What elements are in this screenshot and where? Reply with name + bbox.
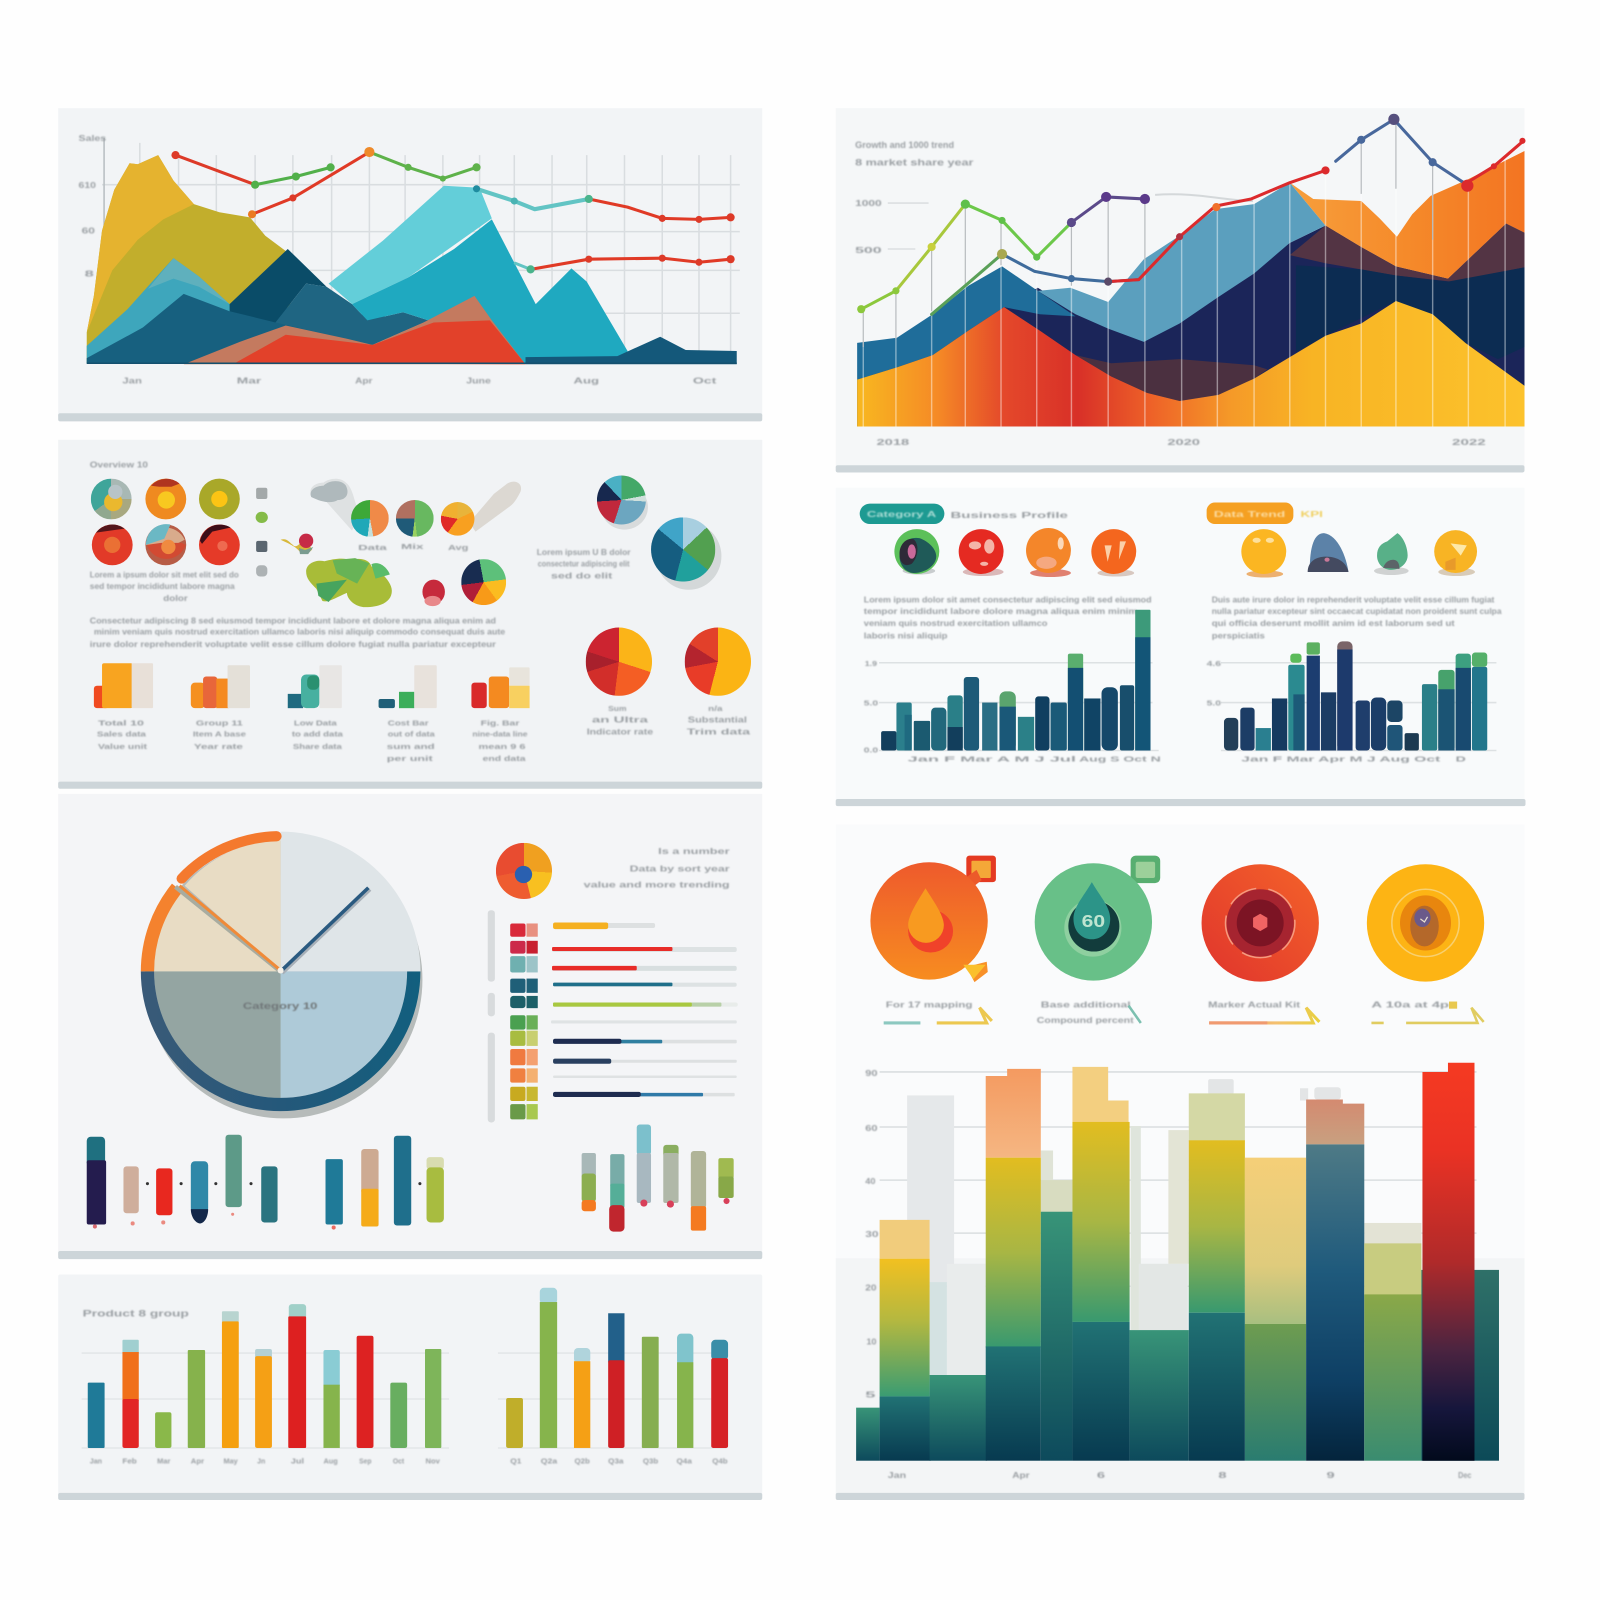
big pie captions: Trim data [687, 728, 751, 737]
area: light blue band [1038, 183, 1326, 342]
left bar chart: 5.0 [864, 700, 878, 708]
small vertical bars left [87, 1135, 444, 1230]
area: teal peak [352, 219, 628, 363]
x axis labels: 8 [1218, 1471, 1227, 1480]
area: red layer [235, 320, 526, 364]
x axis labels: Feb [122, 1457, 137, 1465]
left paragraph: tempor incididunt labore dolore magna aliqua enim minim [864, 606, 1138, 616]
right-aligned text: Data by sort year [630, 863, 730, 873]
icon: green drop [1035, 856, 1160, 981]
area: dark base right [526, 337, 737, 364]
x axis labels: Nov [426, 1457, 440, 1465]
left paragraph [864, 595, 1152, 640]
right paragraph: Duis aute irure dolor in reprehenderit voluptate velit esse cillum fugiat [1212, 595, 1494, 605]
icon captions: A 10a at 4p [1371, 1001, 1449, 1010]
y axis labels: 60 [82, 227, 96, 236]
mini bar captions: Sales data [97, 730, 147, 739]
right caption [537, 548, 631, 581]
left bar chart: 1.9 [865, 660, 877, 668]
x axis labels: Q2b [574, 1457, 591, 1465]
bars left group [88, 1304, 441, 1448]
right bar chart: D [1456, 756, 1466, 764]
bars right group [506, 1288, 728, 1448]
x axis labels [877, 438, 1487, 447]
orange pill header: KPI [1301, 510, 1323, 519]
x axis labels: Mar [237, 377, 263, 386]
panel: icons and gradient stacked bars [836, 824, 1524, 1500]
clock hands [176, 887, 281, 971]
x axis labels: Q1 [510, 1457, 521, 1465]
x axis labels: Q3a [608, 1457, 625, 1465]
area: maroon band high [1290, 223, 1524, 282]
y axis labels: 20 [865, 1283, 877, 1292]
area: navy peak [230, 249, 327, 322]
legend swatches [256, 488, 268, 577]
mini bar captions: out of data [388, 730, 436, 739]
icon: amber target [1367, 864, 1484, 982]
title text [855, 140, 974, 167]
left bar chart: 0.0 [864, 747, 878, 755]
mini bar captions: mean 9 6 [479, 742, 526, 751]
x axis labels: Oct [693, 377, 717, 386]
icon captions [884, 1001, 1484, 1025]
small pie labels: Mix [401, 543, 424, 551]
area: dark navy right [1296, 265, 1524, 359]
area: blue band [857, 266, 1076, 380]
left bar chart: Aug S Oct N [1079, 756, 1161, 764]
mini bar captions [97, 719, 528, 763]
teal pill header: Business Profile [951, 510, 1068, 520]
icon captions: For 17 mapping [886, 1001, 972, 1010]
x axis labels: Q4b [712, 1457, 728, 1465]
caption: sed tempor incididunt labore magna [90, 582, 235, 591]
area: teal layer [87, 258, 265, 363]
big pie captions: Substantial [688, 715, 747, 724]
gray connector [1155, 194, 1253, 201]
icon: fire drop [870, 856, 996, 982]
mini bar captions: Fig. Bar [481, 719, 519, 728]
title text: Growth and 1000 trend [855, 140, 954, 150]
y axis labels: 8 [85, 270, 95, 279]
left paragraph: veniam quis nostrud exercitation ullamco [864, 618, 1047, 628]
area: orange band [1290, 151, 1524, 279]
right paragraph: qui officia deserunt mollit anim id est laborum sed ut [1212, 618, 1455, 628]
center label: Category 10 [243, 1001, 317, 1011]
mini bar captions: Total 10 [98, 719, 144, 728]
right caption: Lorem ipsum U B dolor [537, 548, 631, 557]
mini bar captions: per unit [387, 754, 433, 763]
right paragraph: nulla pariatur excepteur sint occaecat cupidatat non proident sunt culpa [1212, 606, 1502, 616]
title text: 8 market share year [855, 157, 974, 167]
big pie captions: n/a [708, 705, 724, 713]
vertical text labels [488, 910, 495, 1122]
big pie captions [587, 705, 751, 737]
icon: green drop: 60 [1082, 911, 1105, 931]
x axis labels: Aug [323, 1457, 338, 1465]
x axis labels: 6 [1097, 1471, 1106, 1480]
x axis labels [888, 1471, 1472, 1480]
orange arcs [147, 888, 177, 971]
x axis labels: Q2a [541, 1457, 558, 1465]
x axis labels [122, 377, 717, 386]
left bar chart [864, 610, 1161, 764]
right bar chart: 5.0 [1207, 700, 1221, 708]
x axis labels: Aug [573, 377, 599, 386]
right bar chart: Jan F Mar Apr M J Aug Oct [1241, 756, 1442, 764]
long paragraph: irure dolor reprehenderit voluptate velit esse cillum dolore fugiat nulla pariatur excepteur [90, 639, 497, 649]
area: maroon band low [1076, 355, 1267, 401]
caption: dolor [163, 594, 189, 603]
x axis labels: Jn [257, 1457, 265, 1465]
mini bar captions: to add data [292, 730, 344, 739]
right caption: consectetur adipiscing elit [538, 559, 630, 568]
panel: top-right stacked area chart [836, 108, 1526, 472]
mini bar captions: Value unit [98, 742, 148, 751]
right paragraph: perspiciatis [1212, 630, 1265, 640]
long paragraph [90, 615, 505, 649]
panel: clock pie and bars [58, 794, 762, 1259]
y axis labels: Sales [79, 134, 107, 143]
left paragraph: laboris nisi aliquip [864, 630, 947, 640]
area: olive mountain [87, 155, 296, 363]
left bar chart: Jan F Mar A M J Jul [908, 756, 1076, 764]
mini bar captions: sum and [387, 742, 435, 751]
line series [861, 119, 1523, 314]
line series [176, 152, 731, 269]
mini bar captions: nine-data line [472, 730, 528, 739]
orange pill header: Data Trend [1214, 510, 1285, 519]
x axis labels: 9 [1327, 1471, 1336, 1480]
mini bar captions: Cost Bar [388, 719, 429, 728]
swatch column [510, 923, 538, 1119]
x axis labels: Apr [355, 377, 373, 386]
icon grid [91, 479, 240, 565]
heading: Product 8 group [83, 1308, 189, 1318]
teal pill header: Category A [867, 510, 936, 519]
x axis labels: Mar [157, 1457, 171, 1465]
y axis labels: 30 [865, 1230, 879, 1239]
icon: red target [1202, 864, 1319, 982]
small pie labels: Data [358, 544, 389, 552]
small pie labels: Avg [448, 544, 468, 552]
right bar chart [1207, 641, 1496, 764]
right bar chart: 4.6 [1207, 660, 1221, 668]
pies right [597, 476, 721, 590]
small donut pie [496, 843, 552, 899]
area: light teal peak [329, 186, 492, 304]
mini bar captions: Year rate [194, 742, 243, 751]
right caption: sed do elit [551, 572, 613, 581]
icon captions: Compound percent [1037, 1016, 1134, 1025]
small pie labels [358, 543, 468, 552]
x axis labels: 2022 [1452, 438, 1487, 447]
area: teal highlight [148, 258, 230, 304]
area: dark blue layer [87, 294, 429, 363]
ghost bars [907, 1079, 1421, 1376]
big pie captions: Sum [608, 705, 627, 713]
area: navy band [857, 223, 1524, 427]
y labels [855, 199, 929, 255]
x axis labels: 2018 [877, 438, 910, 447]
right paragraph [1212, 595, 1502, 640]
big pie captions: an Ultra [592, 715, 649, 724]
panel: circles and pies [58, 440, 762, 789]
x axis labels: Dec [1458, 1471, 1472, 1480]
right-aligned text: value and more trending [584, 880, 730, 890]
x axis labels: Oct [393, 1457, 405, 1465]
area: warm bottom band [857, 301, 1524, 427]
y axis labels: 90 [865, 1069, 878, 1078]
long paragraph: minim veniam quis nostrud exercitation ullamco laboris nisi aliquip commodo consequat duis aute [94, 627, 505, 637]
x axis labels: Q3b [643, 1457, 659, 1465]
mini bars [94, 663, 530, 708]
mini bar captions: Group 11 [196, 719, 244, 728]
x axis labels: Jan [888, 1471, 906, 1480]
x axis labels: Apr [1012, 1471, 1031, 1480]
area: rose layer [184, 296, 526, 364]
mini bar captions: Low Data [294, 719, 338, 728]
teal pill header [860, 504, 1068, 524]
orange pill header [1207, 503, 1323, 524]
left paragraph: Lorem ipsum dolor sit amet consectetur adipiscing elit sed eiusmod [864, 595, 1152, 605]
big pie captions: Indicator rate [587, 728, 654, 737]
vertical drop lines [863, 119, 1505, 427]
x axis labels: Jan [122, 377, 142, 386]
big segmented pie [141, 832, 422, 1118]
heading: Overview 10 [90, 460, 149, 469]
area: gold highlight [87, 155, 194, 333]
x axis labels: Jul [291, 1457, 304, 1465]
y axis labels [865, 1069, 879, 1399]
y axis labels: 10 [866, 1337, 877, 1346]
y axis labels [79, 134, 107, 279]
small vertical bars right [582, 1124, 734, 1232]
right-aligned text: Is a number [658, 846, 731, 856]
icon captions: Base additional [1041, 1001, 1131, 1010]
right-aligned text [584, 846, 731, 890]
icon captions: Marker Actual Kit [1208, 1001, 1300, 1010]
x axis labels: Sep [359, 1457, 372, 1465]
mini bar captions: end data [483, 754, 527, 763]
x axis labels [90, 1457, 728, 1465]
y axis labels: 60 [865, 1124, 878, 1133]
x axis labels: Q4a [677, 1457, 693, 1465]
panel: bottom-left bar chart [58, 1274, 762, 1500]
y axis labels: 40 [865, 1177, 876, 1186]
big pies [586, 628, 751, 696]
caption [90, 571, 239, 603]
y axis labels: 5 [865, 1390, 877, 1399]
x axis labels: Apr [191, 1457, 204, 1465]
left icons [894, 528, 1136, 577]
x axis labels: 2020 [1167, 438, 1201, 447]
right icons [1241, 529, 1477, 578]
y labels: 1000 [855, 199, 882, 208]
x axis labels: June [466, 377, 491, 386]
caption: Lorem a ipsum dolor sit met elit sed do [90, 571, 239, 580]
long paragraph: Consectetur adipiscing 8 sed eiusmod tempor incididunt labore et dolore magna aliqua enim ad [90, 615, 496, 625]
x axis labels: May [223, 1457, 238, 1465]
horizontal progress bars [551, 922, 738, 1097]
mini bar captions: Share data [293, 742, 343, 751]
panel: pill headers, icons and twin bar charts [836, 488, 1526, 806]
stacked gradient bars [856, 1063, 1499, 1461]
mini bar captions: Item A base [193, 730, 246, 739]
x axis labels: Jan [90, 1457, 102, 1465]
blobs and small pies [281, 479, 521, 607]
y labels: 500 [855, 246, 883, 255]
y axis labels: 610 [79, 181, 97, 190]
panel: top-left area chart [58, 108, 762, 421]
